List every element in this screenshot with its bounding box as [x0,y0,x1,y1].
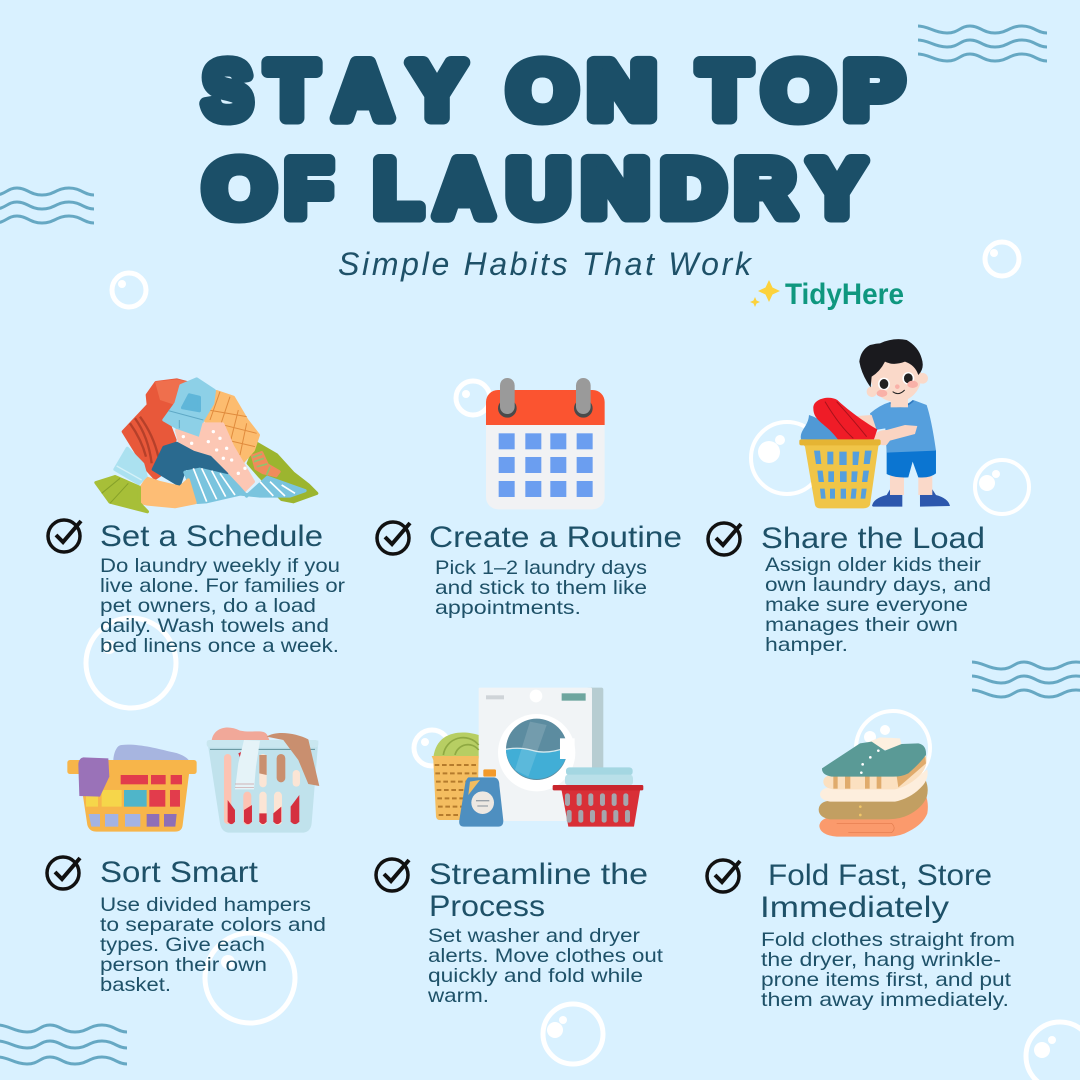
body text: Do laundry weekly if you [100,555,340,577]
title: A [435,144,493,234]
soap bubbles [86,242,1080,1080]
title: L [374,144,422,234]
body text: Fold clothes straight from [761,929,1015,951]
panel: Fold Fast, Store Immediately [707,737,1015,1011]
body text: own laundry days, and [765,574,991,596]
icon: check [707,860,740,892]
illustration: pile of clothes [96,379,317,512]
body text [765,554,991,656]
heading: Process [429,890,545,923]
body text [435,557,647,619]
title: N [588,46,656,136]
subtitle: Simple Habits That Work [338,246,753,282]
title: S [203,46,252,136]
body text: make sure everyone [765,594,968,616]
body text: daily. Wash towels and [100,615,329,637]
wave decoration: left [0,188,94,223]
body text: Set washer and dryer [428,925,641,947]
body text: pet owners, do a load [100,595,316,617]
title: T [699,46,750,136]
title: D [661,144,725,234]
heading: Share the Load [761,522,985,555]
body text: prone items first, and put [761,969,1012,991]
title: Y [409,46,465,136]
body text: alerts. Move clothes out [428,945,664,967]
body text: and stick to them like [435,577,647,599]
icon: check [377,522,410,554]
body text [761,929,1015,1011]
wave decoration: bottom left [0,1025,127,1064]
heading: Set a Schedule [100,520,323,553]
title: O [204,144,275,234]
body text: Pick 1–2 laundry days [435,557,647,579]
heading: Sort Smart [100,856,259,889]
body text: basket. [100,974,171,996]
panel: Create a Routine [377,378,682,619]
title: Y [809,144,865,234]
body text [100,555,346,657]
title [203,46,903,234]
title: O [763,46,834,136]
illustration: calendar [486,378,605,509]
heading [760,859,992,924]
body text: bed linens once a week. [100,635,339,657]
logo: TidyHere: TidyHere [785,278,904,311]
body text: to separate colors and [100,914,326,936]
illustration: washing machine [432,688,643,827]
illustration: stack of folded clothes [819,737,928,837]
body text: Use divided hampers [100,894,311,916]
panel: Sort Smart [47,728,326,996]
body text: the dryer, hang wrinkle- [761,949,1001,971]
wave decoration: top right [918,26,1047,61]
body text: Assign older kids their [765,554,982,576]
icon: check [48,520,81,552]
wave decoration: right [972,662,1080,697]
body text: manages their own [765,614,958,636]
body text: live alone. For families or [100,575,346,597]
body text: warm. [427,985,489,1007]
body text: appointments. [435,597,581,619]
title: T [267,46,317,136]
body text: types. Give each [100,934,265,956]
title: P [844,46,903,136]
title: A [334,46,392,136]
body text: person their own [100,954,267,976]
title: O [508,46,577,136]
illustration: two hampers [67,728,319,833]
body text [427,925,664,1007]
icon: check [376,859,409,891]
heading: Immediately [760,891,949,924]
title: F [285,144,332,234]
panel: Streamline the Process [376,688,664,1007]
title: U [507,144,570,234]
heading: Fold Fast, Store [768,859,992,892]
title: N [582,144,649,234]
body text [100,894,326,996]
illustration: boy with laundry basket [799,339,950,508]
body text: hamper. [765,634,848,656]
heading: Streamline the [429,858,648,891]
panel: Share the Load [708,339,991,656]
heading: Create a Routine [429,521,682,554]
icon: check [708,523,741,555]
title: R [735,144,795,234]
panel: Set a Schedule [48,379,346,657]
heading [429,858,648,923]
body text: quickly and fold while [428,965,643,987]
body text: them away immediately. [761,989,1009,1011]
icon: check [47,857,80,889]
